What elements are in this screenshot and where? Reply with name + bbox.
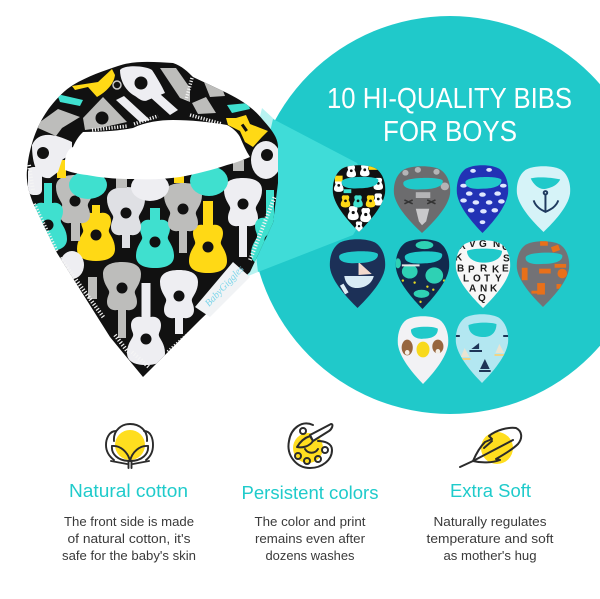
guitars print: collar band <box>28 66 268 195</box>
icon: cotton <box>106 424 153 468</box>
small bib 10: light blue boats <box>455 314 509 383</box>
body: extra soft <box>426 515 554 563</box>
light beam from large bib to first small bib <box>240 108 374 276</box>
body: natural cotton <box>62 515 196 563</box>
icon: paint palette <box>289 423 332 468</box>
small bib 6: teal dinosaurs <box>395 239 449 309</box>
body: persistent colors: remains even after <box>255 532 365 546</box>
small bib 7: black letters: P <box>468 265 475 276</box>
column: persistent colors <box>242 483 378 563</box>
body: natural cotton: of natural cotton, it's <box>68 532 190 546</box>
brand tag: BabyGiggles <box>203 264 246 309</box>
large bib with guitar print <box>26 62 278 377</box>
small bib 7: black letters: E <box>502 264 509 275</box>
small bib 7: black letters: K <box>490 283 498 294</box>
title: FOR BOYS <box>383 116 517 148</box>
teal circle panel <box>251 16 600 414</box>
body: extra soft: Naturally regulates <box>434 515 546 529</box>
small bib 2: grey fox <box>394 166 450 233</box>
body: natural cotton: safe for the baby's skin <box>62 549 196 563</box>
small bib 7: black letters: G <box>479 239 487 250</box>
collar stitching <box>92 78 222 130</box>
small bib 3: blue crabs <box>457 165 508 233</box>
heading: natural cotton: Natural cotton <box>69 481 188 501</box>
small bib 7: black letters: O <box>473 273 481 284</box>
small bib 7: black letters: Y <box>495 273 502 284</box>
small bib 7: black letters: L <box>463 273 469 284</box>
stitched edges <box>29 165 275 368</box>
small bib 7: black letters: N <box>493 239 500 250</box>
small bib 7: black letters: B <box>457 264 464 275</box>
small bib 7: black letters: X <box>459 241 466 252</box>
column: natural cotton <box>62 481 196 563</box>
small bib 7: black letters: A <box>469 283 476 294</box>
guitars print: lower rows <box>29 175 289 365</box>
heading: persistent colors: Persistent colors <box>242 483 378 503</box>
small bib 1: guitars <box>333 164 385 232</box>
small bib 7: black letters: K <box>455 253 463 264</box>
small bib 7: black letters: V <box>469 239 476 250</box>
snap ring <box>113 81 121 89</box>
brand tag <box>195 262 250 317</box>
small bib 7: black letters: C <box>502 242 509 253</box>
small bib 7: black letters: S <box>503 254 510 265</box>
small bib 7: black letters <box>455 239 510 308</box>
heading: extra soft: Extra Soft <box>450 481 531 501</box>
body: persistent colors: dozens washes <box>266 549 354 563</box>
title <box>327 83 572 148</box>
small bib 7: black letters: N <box>480 283 487 294</box>
body: extra soft: as mother's hug <box>444 549 537 563</box>
small bib 7: black letters: T <box>484 273 490 284</box>
body: extra soft: temperature and soft <box>426 532 554 546</box>
icon: feather <box>460 428 521 467</box>
small bib 7: black letters: K <box>492 265 500 276</box>
body: persistent colors: The color and print <box>254 515 366 529</box>
title: 10 HI-QUALITY BIBS <box>327 83 572 115</box>
small bib 9: white with bears <box>398 316 448 384</box>
small bib 4: anchor <box>517 166 570 232</box>
body: persistent colors <box>254 515 366 563</box>
neck opening <box>65 120 250 179</box>
small bib 7: black letters: Q <box>478 293 486 304</box>
small bib 5: navy sailboat <box>330 239 385 308</box>
small bib 8: grey with orange animals <box>517 241 569 307</box>
small bib 7: black letters: R <box>480 264 487 275</box>
body: natural cotton: The front side is made <box>64 515 194 529</box>
column: extra soft <box>426 481 554 563</box>
guitars print: upper row under neck <box>57 141 281 201</box>
